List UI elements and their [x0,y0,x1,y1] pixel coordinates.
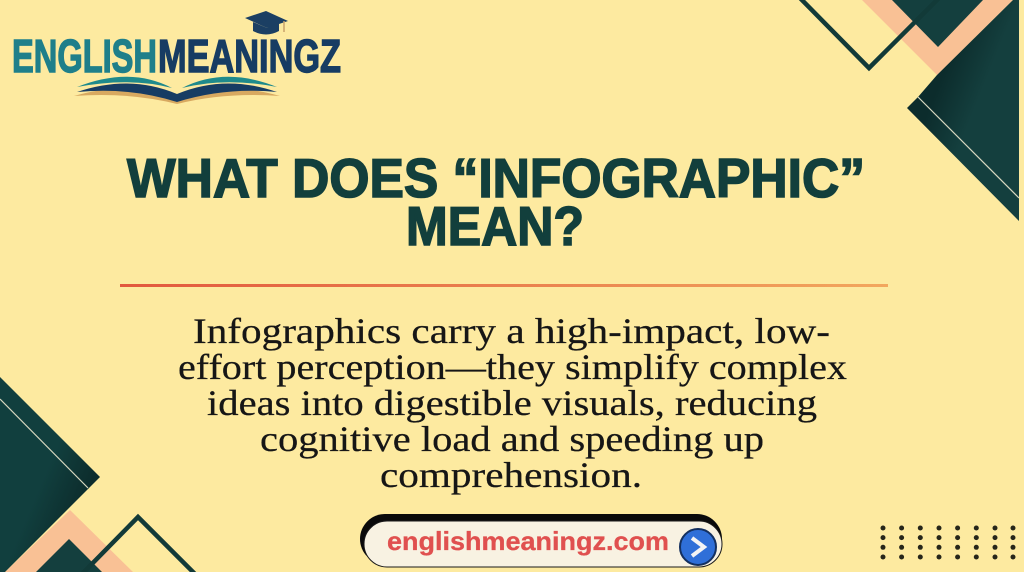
icon: arrow circle [680,529,716,565]
icon: graduation cap [245,11,288,34]
body text: cognitive load and speeding up [260,419,764,459]
body text: effort perception—they simplify complex [178,347,847,387]
website text: englishmeaningz.com [387,526,669,556]
logo wordmark: MEANINGZ [158,30,341,82]
logo [12,11,341,104]
title: WHAT DOES “INFOGRAPHIC” [127,147,865,209]
icon: open book [74,77,280,104]
divider rule [120,284,888,287]
body text: ideas into digestible visuals, reducing [207,383,817,423]
logo wordmark: ENGLISH [12,30,157,82]
body text: comprehension. [380,455,642,495]
dot grid [880,526,1016,560]
top-right geometric decoration [800,0,1019,221]
body text [178,311,847,495]
title [127,147,865,257]
website pill button [360,514,722,567]
bottom-left geometric decoration [0,377,195,572]
body text: Infographics carry a high-impact, low- [193,311,830,351]
title: MEAN? [406,195,584,257]
